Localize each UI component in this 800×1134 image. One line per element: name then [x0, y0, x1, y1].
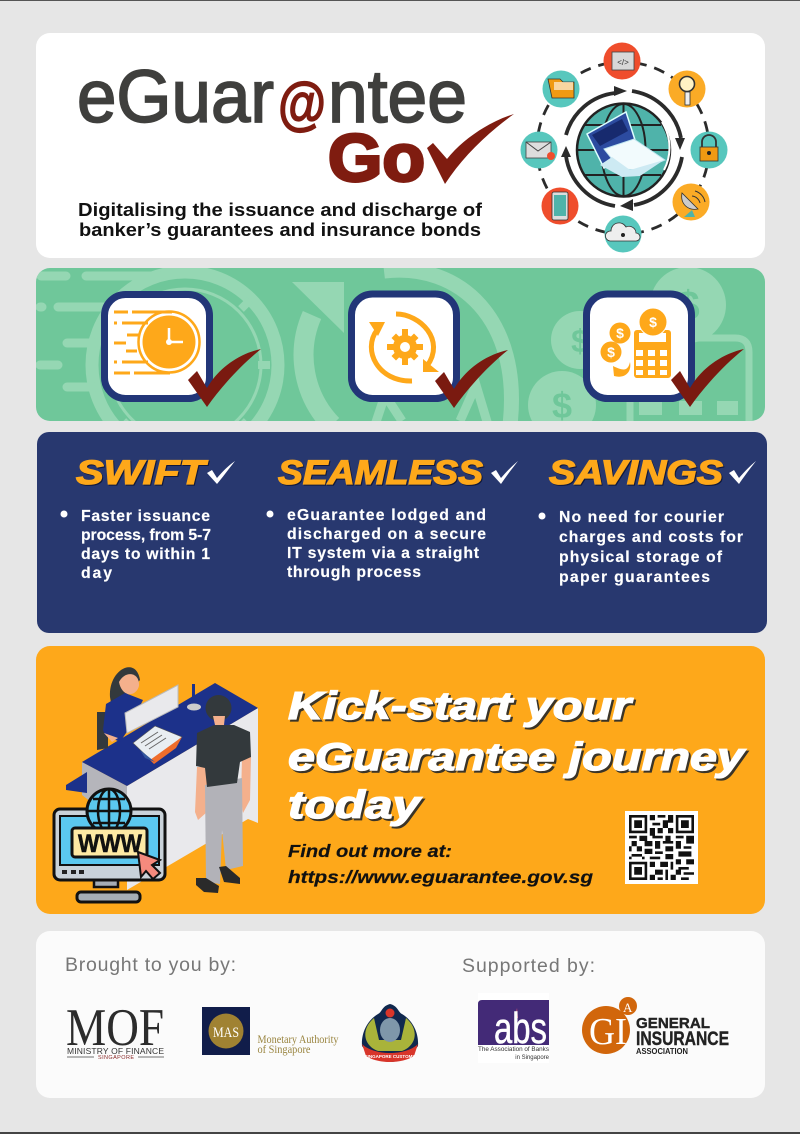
icon: www monitor [54, 789, 165, 902]
icon: coins and calculator: $ [616, 325, 624, 341]
check mark 3 [671, 349, 744, 407]
check mark 2 [435, 350, 508, 408]
panel: header [36, 33, 765, 258]
card: swift [104, 294, 210, 398]
decorative enlarged icons: $ [676, 282, 700, 329]
check mark 1 [188, 349, 261, 407]
icon: padlock [690, 132, 728, 168]
title: eGuarantee: ntee [328, 55, 467, 138]
icon: digital network ring [520, 42, 728, 252]
lamp [187, 684, 201, 710]
icon: coins and calculator [600, 308, 671, 378]
panel: call to action [36, 646, 765, 914]
logo: GIA: INSURANCE [636, 1029, 729, 1050]
decorative enlarged icons [36, 268, 752, 421]
icon: www monitor: WWW [78, 830, 142, 858]
column: savings [538, 454, 756, 586]
column: swift: day [81, 565, 112, 582]
title: eGuarantee: eGuar [77, 55, 274, 138]
column: swift [60, 454, 235, 582]
column: seamless: SEAMLESS [278, 454, 483, 492]
column: swift: SWIFT [76, 454, 209, 492]
heading: call to action: Kick-start your [288, 685, 633, 728]
heading: call to action: eGuarantee journey [288, 736, 747, 779]
logo: GIA: ASSOCIATION [636, 1047, 688, 1056]
logo: MAS: of Singapore [258, 1044, 310, 1056]
logo: MOF: MINISTRY OF FINANCE [67, 1046, 164, 1056]
logo: GIA [582, 997, 729, 1056]
logo: Singapore Customs crest: SINGAPORE CUSTOMS [365, 1054, 415, 1059]
person: clerk [97, 667, 143, 750]
icon: gear with arrows [369, 314, 439, 381]
icon: documents [587, 112, 665, 177]
column: swift: process, from 5-7 [81, 527, 211, 544]
column: seamless [266, 454, 518, 581]
heading: call to action: today [288, 784, 423, 827]
logo: ABS: in Singapore [515, 1055, 550, 1061]
logo: MOF: SINGAPORE [98, 1055, 134, 1061]
person: visitor [195, 695, 251, 893]
logo: MAS: Monetary Authority [258, 1034, 339, 1046]
logo: ABS: abs [494, 1004, 547, 1053]
link text: Find out more at: [288, 841, 452, 861]
icon: code window [604, 42, 640, 80]
heading: call to action [288, 685, 747, 827]
column: seamless: through process [287, 564, 421, 581]
card: savings [586, 294, 692, 398]
icon: speeding clock [114, 312, 200, 373]
icon: envelope [520, 132, 558, 168]
icon: coins and calculator: $ [607, 344, 615, 360]
icon: phone [542, 188, 578, 224]
partition [125, 685, 178, 733]
column: savings: SAVINGS [549, 454, 723, 492]
icon: satellite dish [672, 184, 710, 220]
subtitle: banker’s guarantees and insurance bonds [79, 219, 481, 240]
column: swift: Faster issuance [81, 508, 210, 525]
logo: GIA: A [623, 1000, 633, 1015]
logo: ABS [478, 993, 550, 1063]
icon: magnifier [668, 70, 706, 108]
panel: three icons on green [36, 268, 765, 421]
icon: coins and calculator: $ [649, 314, 657, 330]
label: brought to you by: Brought to you by: [65, 954, 236, 976]
decorative enlarged icons: $ [552, 385, 572, 426]
icon: rotating arrows [566, 91, 682, 206]
column: swift: days to within 1 [81, 546, 210, 563]
logo: Singapore Customs crest [362, 1004, 418, 1062]
title: eGuarantee [77, 55, 467, 138]
icon: code window: </> [617, 58, 629, 67]
QR code [625, 811, 698, 884]
column: savings: charges and costs for [559, 529, 743, 546]
column: savings: physical storage of [559, 549, 723, 566]
title: eGuarantee: @ [278, 71, 326, 136]
decorative enlarged icons: $ [571, 323, 589, 359]
icon: globe [577, 104, 670, 196]
label: supported by: Supported by: [462, 955, 595, 977]
logo: GIA: GI [589, 1011, 627, 1053]
documents [133, 726, 182, 764]
column: seamless: IT system via a straight [287, 545, 480, 562]
column: savings: paper guarantees [559, 569, 710, 586]
link text [288, 841, 593, 887]
logo: GIA: GENERAL [636, 1015, 710, 1032]
icon: cloud [604, 216, 642, 252]
column: savings: No need for courier [559, 509, 724, 526]
illustration: service counter [54, 667, 258, 902]
column: seamless: eGuarantee lodged and [287, 507, 486, 524]
subtitle [78, 199, 483, 240]
card: seamless [352, 294, 456, 398]
logo: MOF: MOF [66, 999, 164, 1057]
subtitle: Digitalising the issuance and discharge of [78, 199, 483, 220]
link text: https://www.eguarantee.gov.sg [288, 867, 593, 887]
logo: ABS: The Association of Banks [478, 1047, 549, 1053]
desk [66, 683, 258, 890]
icon: folder [542, 70, 580, 108]
panel: benefits [37, 432, 767, 633]
logo: MAS: MAS [213, 1025, 239, 1041]
column: seamless: discharged on a secure [287, 526, 486, 543]
title: Gov with check mark [328, 114, 514, 196]
title: Gov with check mark: Go [328, 121, 425, 196]
panel: partners [36, 931, 765, 1098]
logo: MAS [202, 1007, 339, 1056]
